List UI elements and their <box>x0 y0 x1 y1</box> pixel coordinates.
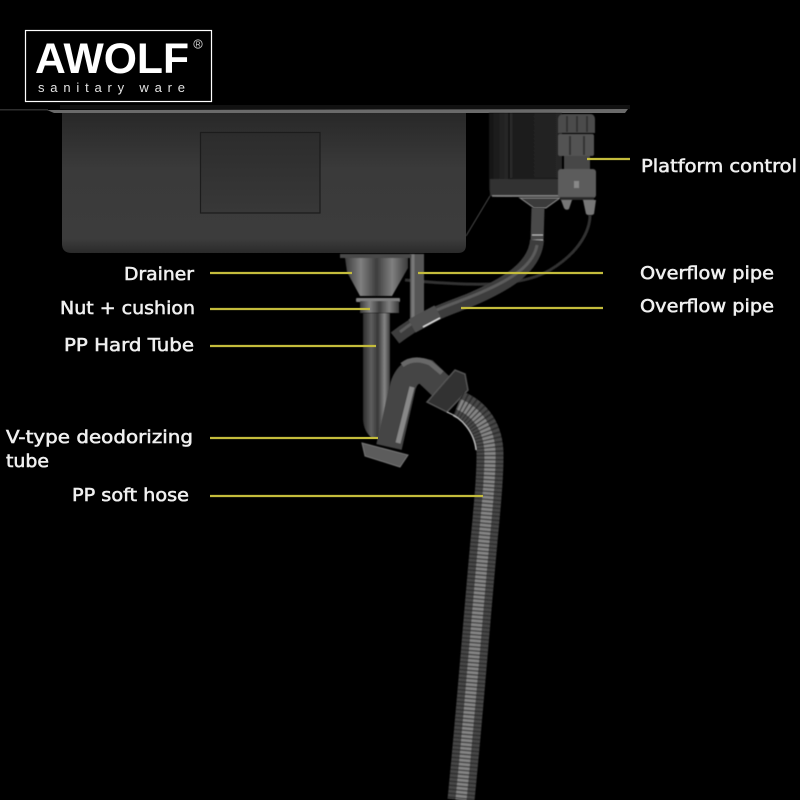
logo: sanitary ware <box>38 80 185 95</box>
V-type trap <box>362 360 468 467</box>
bowl label plate <box>200 132 320 213</box>
hard tube <box>363 313 390 438</box>
logo: R <box>195 42 201 48</box>
sink main bowl <box>62 113 466 253</box>
platform control valve <box>558 114 596 216</box>
label: overflow pipe upper: Overflow pipe <box>640 263 774 284</box>
logo <box>26 30 212 102</box>
label: V-type deodorizing tube: tube <box>6 451 49 472</box>
second bowl <box>466 113 562 236</box>
label: platform control: Platform control <box>641 156 797 177</box>
label: V-type deodorizing tube: V-type deodorizing <box>6 427 193 448</box>
label: nut and cushion: Nut + cushion <box>60 298 195 319</box>
overflow pipe hoses <box>395 208 590 338</box>
soft hose <box>447 404 490 800</box>
label: PP soft hose: PP soft hose <box>72 485 189 506</box>
label: V-type deodorizing tube <box>6 427 378 472</box>
label: overflow pipe lower: Overflow pipe <box>640 296 774 317</box>
label: PP hard tube: PP Hard Tube <box>64 335 194 356</box>
sink rim <box>0 105 630 113</box>
label: drainer: Drainer <box>124 264 195 285</box>
drainer <box>340 254 411 313</box>
logo: AWOLF <box>35 35 189 83</box>
